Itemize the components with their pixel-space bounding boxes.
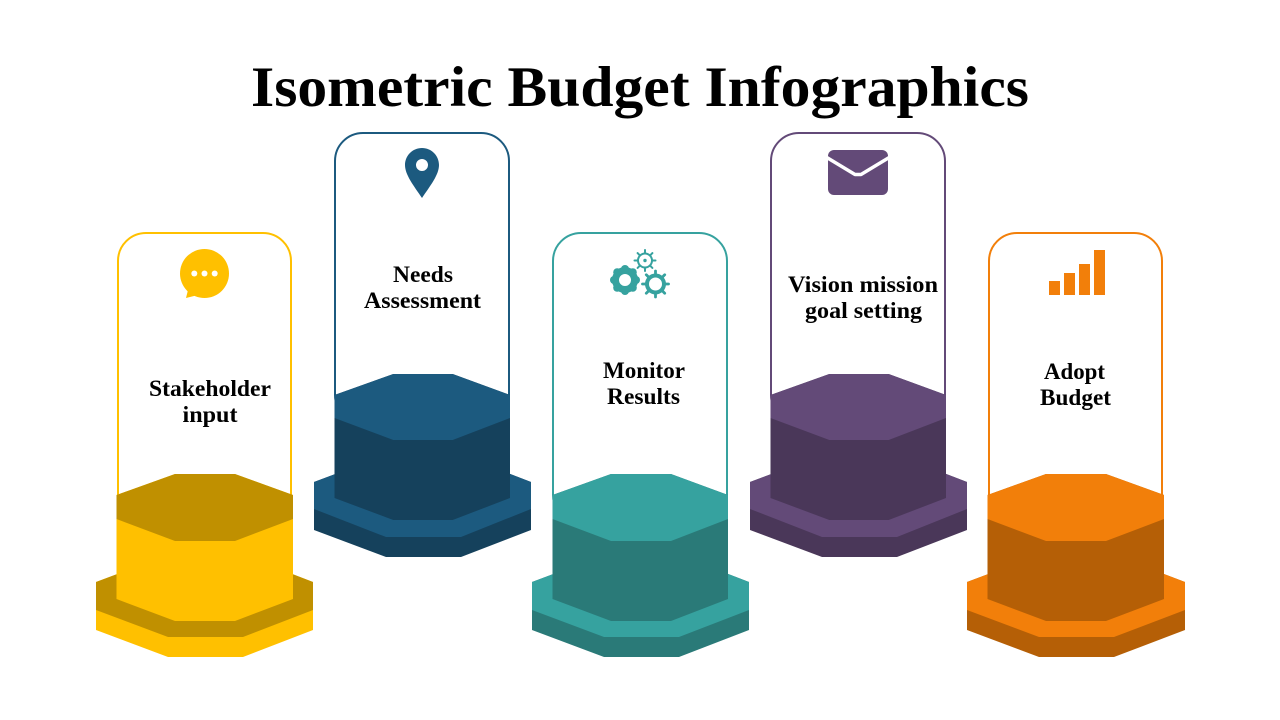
label: Adopt Budget: Budget [1040,385,1111,410]
label: Vision mission goal setting [788,272,938,323]
label: Needs Assessment [364,262,481,313]
icon: gears [610,250,668,297]
label: Monitor Results [603,358,685,409]
icon: bar chart [1049,250,1105,295]
card outline: blue [335,133,509,423]
icon: map pin [405,148,439,198]
label: Adopt Budget: Adopt [1044,359,1105,384]
label: Monitor Results: Monitor [603,358,685,383]
isometric pedestal: purple [750,374,967,557]
card outline: teal [553,233,727,523]
card outline: orange [989,233,1162,523]
label: Stakeholder input: input [182,402,238,427]
column: Stakeholder input [96,233,313,657]
icon: envelope [826,150,890,195]
label: Stakeholder input [149,376,271,427]
label: Adopt Budget [1040,359,1111,410]
label: Vision mission goal setting: Vision mission [788,272,938,297]
isometric pedestal: yellow [96,474,313,657]
card outline: yellow [118,233,291,523]
column: Vision mission goal setting [750,133,967,557]
column: Needs Assessment [314,133,531,557]
title: Isometric Budget Infographics [251,56,1029,119]
label: Monitor Results: Results [607,384,680,409]
card outline: purple [771,133,945,423]
column: Adopt Budget [967,233,1185,657]
icon: speech bubble [180,249,229,298]
label: Needs Assessment: Needs [393,262,453,287]
isometric pedestal: teal [532,474,749,657]
label: Stakeholder input: Stakeholder [149,376,271,401]
label: Needs Assessment: Assessment [364,288,481,313]
isometric pedestal: blue [314,374,531,557]
label: Vision mission goal setting: goal setting [805,298,923,323]
column: Monitor Results [532,233,749,657]
isometric pedestal: orange [967,474,1185,657]
